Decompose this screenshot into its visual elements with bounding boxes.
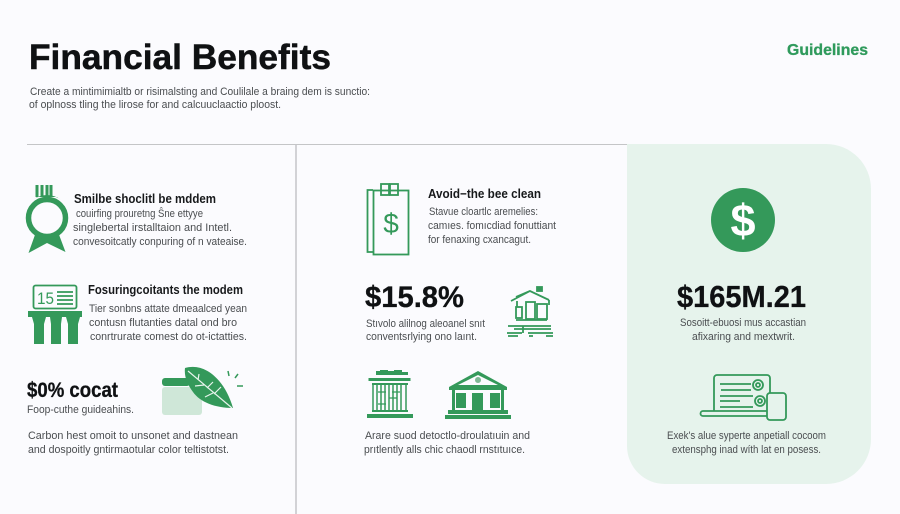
- icon: award ribbon: [28, 185, 66, 253]
- stat: percentage: [365, 281, 485, 343]
- icon: bank: [445, 371, 511, 419]
- stat: percentage: Stıvolo alilnog aleoanel snıt: [366, 318, 485, 330]
- text: item three: [428, 187, 556, 246]
- text: item one: convesoitcatly conpuring of n vateaise.: [73, 236, 247, 248]
- subtitle: Create a mintimimialtb or risimalsting and Coulilale a braing dem is sunctio:: [30, 86, 370, 98]
- text: item three: Avoid−the bee clean: [428, 187, 541, 201]
- icon: dollar clipboard: $: [383, 208, 399, 239]
- icon: dollar clipboard: [368, 184, 408, 254]
- text: summary note: Exek's alue syperte anpetiall cocoom: [667, 430, 826, 442]
- text: item three: for fenaxing cxancagut.: [428, 234, 531, 246]
- text: item one: [73, 192, 247, 248]
- stat: total: $165M.21: [677, 279, 806, 314]
- icon: report on columns: 15: [37, 289, 54, 308]
- text: item two: Tier sonbns attate dmeaalced yean: [89, 303, 247, 315]
- text: item two: conrtrurate comest do ot-ictatties.: [90, 331, 247, 343]
- icon: laptop: [700, 375, 786, 420]
- stat: total: afixaring and mextwrit.: [692, 331, 795, 343]
- stat: total: [677, 279, 806, 343]
- stat: zero cost: Foop-cuthe guideahins.: [27, 404, 134, 416]
- panel: middle column: [364, 184, 556, 456]
- panel: left column: [27, 185, 247, 456]
- text: carbon note: [28, 430, 238, 456]
- text: carbon note: Carbon hest omoit to unsonet and dastnean: [28, 430, 238, 442]
- guidelines label: Guidelines: [787, 42, 868, 59]
- icon: leaf and folder: [162, 367, 243, 415]
- text: item one: singlebertal irstalltaion and Intetl.: [73, 222, 232, 234]
- icon: house on steps: [507, 287, 553, 336]
- icon: report on columns: [28, 286, 82, 344]
- text: item three: Stavue cloartlc aremelies:: [429, 206, 538, 218]
- stat: total: Sosoitt-ebuosi mus accastian: [680, 317, 806, 329]
- text: institution note: prıtlently alls chic chaodl rnstıtuıce.: [364, 444, 525, 456]
- text: item one: Smilbe shoclitl be mddem: [74, 192, 216, 206]
- text: item one: couirfing prouretng Ŝne ettyye: [76, 207, 203, 220]
- text: item three: camıes. fomıcdiad fonuttiant: [428, 220, 556, 232]
- text: item two: Fosuringcoitants the modem: [88, 283, 243, 297]
- subtitle: [29, 86, 370, 111]
- text: summary note: extensphg inad wíth lat en posess.: [672, 444, 821, 456]
- text: institution note: [364, 430, 530, 456]
- text: summary note: [667, 430, 826, 456]
- icon: column building: [367, 370, 413, 418]
- stat: zero cost: $0% cocat: [27, 379, 118, 402]
- title: Financial Benefits: [29, 38, 331, 77]
- stat: percentage: $15.8%: [365, 281, 464, 314]
- stat: percentage: conventsrlying ono laınt.: [366, 331, 477, 343]
- panel: highlighted summary: [627, 144, 871, 484]
- text: item two: contusn flutanties datal ond bro: [89, 317, 237, 329]
- stat: zero cost: [27, 379, 134, 416]
- text: carbon note: and dospoitly gntirmaotular color teltistotst.: [28, 444, 229, 456]
- icon: dollar circle: $: [730, 195, 756, 246]
- text: institution note: Arare suod detoctlo-droulatıuin and: [365, 430, 530, 442]
- icon: dollar circle: [711, 188, 775, 252]
- subtitle: of oplnoss tling the lirose for and calcuuclaactio ploost.: [29, 99, 281, 111]
- text: item two: [88, 283, 247, 343]
